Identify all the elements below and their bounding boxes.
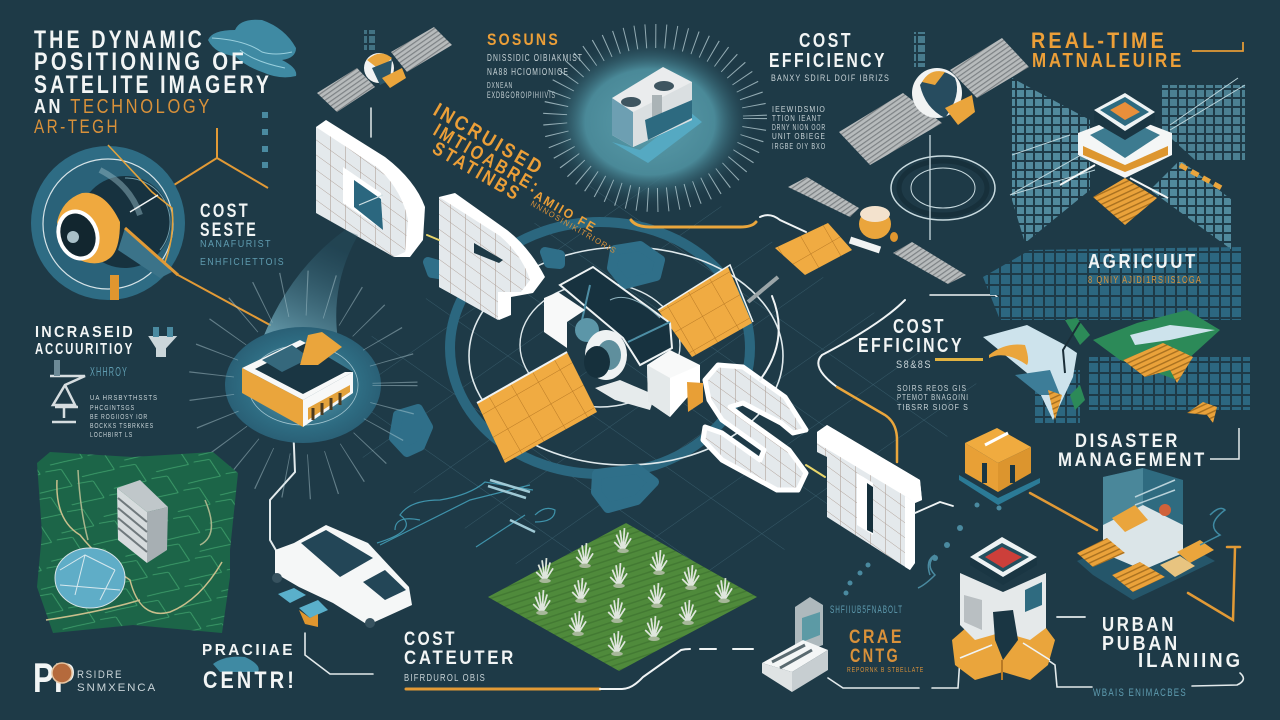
text: real-time: MATNALEUIRE <box>1032 50 1184 72</box>
top-left satellite <box>317 27 452 112</box>
radar rings <box>891 135 995 240</box>
text: cost efficiency top: UNIT OBIEGE <box>772 132 826 141</box>
orange tab <box>687 382 703 412</box>
text: cost seste <box>200 201 285 268</box>
text: cost efficiency right: COST <box>893 316 946 338</box>
rotated text: increased: IMTIOABRE: <box>430 120 544 198</box>
rotated text: increased: AMIIO FE <box>532 188 600 236</box>
mid satellite <box>775 177 966 284</box>
text: crae cntg: REPORNK B STBELLATE <box>847 667 924 674</box>
top center building with glow <box>542 34 758 210</box>
rotated text: increased <box>428 99 618 256</box>
icon: orange cube <box>959 428 1040 505</box>
title <box>34 26 272 138</box>
text: cost seste: ENHFICIETTOIS <box>200 257 285 268</box>
text: sosuns: DXNEAN <box>487 81 513 90</box>
text: crae cntg: CNTG <box>850 646 900 667</box>
text: increased accuracy: PHCGINTSGS <box>90 405 135 412</box>
teal blobs <box>394 246 660 508</box>
text: increased accuracy: LOCHBIRT LS <box>90 432 133 439</box>
text: increased accuracy: ACCUURITIOY <box>35 341 134 358</box>
text: agriculture: AGRICUUT <box>1088 251 1198 273</box>
text: cost efficiency top: BANXY SDIRL DOIF IBRIZS <box>771 73 890 83</box>
big letter D <box>316 120 425 257</box>
text: cost efficiency right: S8&8S <box>896 359 932 371</box>
text: cost efficiency top: IEEWIDSMIO <box>772 105 826 114</box>
left solar panel <box>477 352 597 463</box>
center-left box with glow <box>211 230 395 477</box>
text: sosuns: NA88 HCIOMIONIOE <box>487 67 569 78</box>
icon: telescope stand <box>50 360 85 422</box>
central orbit rings <box>450 222 783 474</box>
text: cost seste: SESTE <box>200 220 258 241</box>
crop field <box>488 523 757 671</box>
text: urban planning: URBAN <box>1102 614 1176 636</box>
text: crae cntg: CRAE <box>849 627 904 648</box>
text: disaster management <box>1058 428 1239 471</box>
title: AR-TEGH <box>34 117 120 138</box>
left white block <box>544 292 585 348</box>
text: cost efficiency right <box>858 316 983 412</box>
central satellite <box>477 265 778 463</box>
big letter T <box>817 425 922 570</box>
text: practice center: PRACIIAE <box>202 642 295 659</box>
kiosk <box>762 597 828 692</box>
text: disaster management: DISASTER <box>1075 431 1180 452</box>
antenna <box>748 277 778 302</box>
text: cost efficiency top <box>769 30 890 151</box>
base platform <box>595 380 655 410</box>
chip tower with data wings <box>1010 78 1245 250</box>
text: crae cntg <box>830 604 924 674</box>
server tower <box>952 537 1055 680</box>
scattered teal dots <box>844 502 1002 596</box>
logo <box>33 654 157 701</box>
text: increased accuracy <box>35 324 158 439</box>
text: real-time: REAL-TIME <box>1031 28 1167 53</box>
rotated text: increased: STATINBS <box>428 138 525 206</box>
right solar panel <box>658 267 752 357</box>
text: practice center: CENTR! <box>203 667 297 694</box>
text: increased accuracy: BOCKKS TSBRKKES <box>90 423 154 430</box>
text: cost efficiency right: TIBSRR SIOOF S <box>897 403 969 412</box>
logo: RSIDRE <box>77 669 123 681</box>
right white block <box>647 350 700 417</box>
text: cost seste: NANAFURIST <box>200 239 272 250</box>
logo: SNMXENCA <box>77 682 157 694</box>
map with building and pond <box>37 452 238 633</box>
text: crae cntg: SHFIIUB5FNABOLT <box>830 604 903 616</box>
text: urban planning: ILANIING <box>1138 650 1243 672</box>
dark body <box>560 267 672 365</box>
icon: storm cloud <box>208 20 296 77</box>
title: POSITIONING OF <box>34 48 247 76</box>
text: sosuns: EXDBGOROIPIHIIVIS <box>487 90 556 100</box>
isometric floor grid <box>280 150 1000 650</box>
text: sosuns: DNISSIDIC OIBIAKMIST <box>487 53 583 64</box>
text: sosuns: SOSUNS <box>487 30 560 49</box>
text: agriculture <box>1088 251 1202 286</box>
text: cost efficiency right: PTEMOT BNAGOINI <box>897 393 969 402</box>
text: cost efficiency top: EFFICIENCY <box>769 50 887 72</box>
text: cost cateuter <box>404 629 516 684</box>
disaster scene isometric <box>1077 468 1225 600</box>
text: disaster management: MANAGEMENT <box>1058 450 1207 471</box>
text: increased accuracy: UA HRSBYTHSSTS <box>90 395 158 402</box>
top-right satellite <box>839 32 1029 165</box>
orange Y connector <box>158 128 268 195</box>
text: cost efficiency right: SOIRS REOS GIS <box>897 384 967 393</box>
wireframe sketches <box>377 480 555 547</box>
rotated text: increased: INCRUISED <box>430 99 548 180</box>
text: cost cateuter: CATEUTER <box>404 648 516 669</box>
text: urban planning: WBAIS ENIMACBES <box>1093 687 1187 699</box>
text: cost efficiency top: IRGBE OIY BXO <box>772 142 826 151</box>
lens <box>585 330 627 380</box>
title: THE DYNAMIC <box>34 26 205 54</box>
text: urban planning: PUBAN <box>1102 633 1180 655</box>
text: cost seste: COST <box>200 201 250 222</box>
text: increased accuracy: INCRASEID <box>35 324 135 341</box>
teal tick marks <box>262 112 268 168</box>
text: sosuns <box>487 30 583 100</box>
big letter P <box>439 193 545 320</box>
text: cost cateuter: BIFRDUROL OBIS <box>404 673 486 684</box>
text: practice center <box>202 642 297 694</box>
title: AN TECHNOLOGY <box>34 96 212 118</box>
text: cost cateuter: COST <box>404 629 457 650</box>
car <box>272 525 412 628</box>
text: real-time <box>1031 28 1243 72</box>
connector lines <box>178 108 1243 689</box>
text: cost efficiency top: TTION IEANT <box>772 114 822 123</box>
text: cost efficiency right: EFFICINCY <box>858 335 964 357</box>
logo: PP <box>33 654 75 701</box>
big letter S <box>703 365 806 490</box>
text: cost efficiency top: COST <box>799 30 853 52</box>
title: SATELITE IMAGERY <box>34 71 272 99</box>
text: increased accuracy: BE ROGIIOSY IOR <box>90 414 148 421</box>
icon: camera lens dial <box>31 145 185 300</box>
text: cost efficiency top: DRNY NION OOR <box>772 123 826 132</box>
rotated text: increased: NNNOSINIKITRIORIS <box>529 199 618 256</box>
world map <box>983 247 1250 423</box>
teal blossom <box>575 318 599 342</box>
text: urban planning <box>1093 614 1243 699</box>
text: increased accuracy: XHHROY <box>90 364 128 379</box>
text: agriculture: 8 QNIY AJIDI1RSIIS1OGA <box>1088 275 1202 286</box>
icon: small telescope stand <box>150 327 175 356</box>
